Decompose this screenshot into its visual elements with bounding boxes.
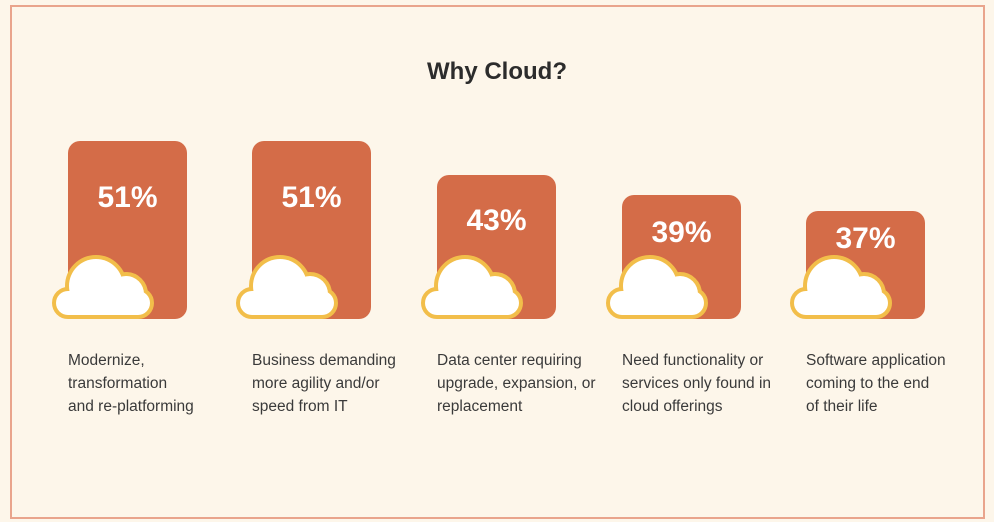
label 1: and re-platforming (68, 398, 194, 415)
percent 51% b: 51% (281, 181, 342, 214)
bar 5 (806, 211, 925, 319)
bar 3 (437, 175, 556, 319)
percent 51%: 51% (97, 181, 158, 214)
percent 39%: 39% (651, 216, 712, 249)
bar 4 (622, 195, 741, 319)
label 4: cloud offerings (622, 398, 723, 415)
percent 37%: 37% (835, 222, 896, 255)
label 4: Need functionality or (622, 352, 763, 369)
label 2: speed from IT (252, 398, 348, 415)
label 1: Modernize, (68, 352, 145, 369)
percent 43%: 43% (466, 204, 527, 237)
icon: cloud 1 (52, 255, 154, 319)
label 1 (68, 352, 194, 415)
label 3 (437, 352, 596, 415)
title: Why Cloud? (427, 58, 567, 85)
bar 1 (68, 141, 187, 319)
label 5 (806, 352, 946, 415)
icon: cloud 4 (606, 255, 708, 319)
label 2 (252, 352, 396, 415)
label 1: transformation (68, 375, 167, 392)
label 4 (622, 352, 771, 415)
label 4: services only found in (622, 375, 771, 392)
label 2: more agility and/or (252, 375, 380, 392)
icon: cloud 3 (421, 255, 523, 319)
label 5: Software application (806, 352, 946, 369)
label 5: of their life (806, 398, 878, 415)
label 3: upgrade, expansion, or (437, 375, 596, 392)
bar 2 (252, 141, 371, 319)
label 3: Data center requiring (437, 352, 582, 369)
icon: cloud 2 (236, 255, 338, 319)
label 3: replacement (437, 398, 522, 415)
icon: cloud 5 (790, 255, 892, 319)
label 2: Business demanding (252, 352, 396, 369)
label 5: coming to the end (806, 375, 929, 392)
